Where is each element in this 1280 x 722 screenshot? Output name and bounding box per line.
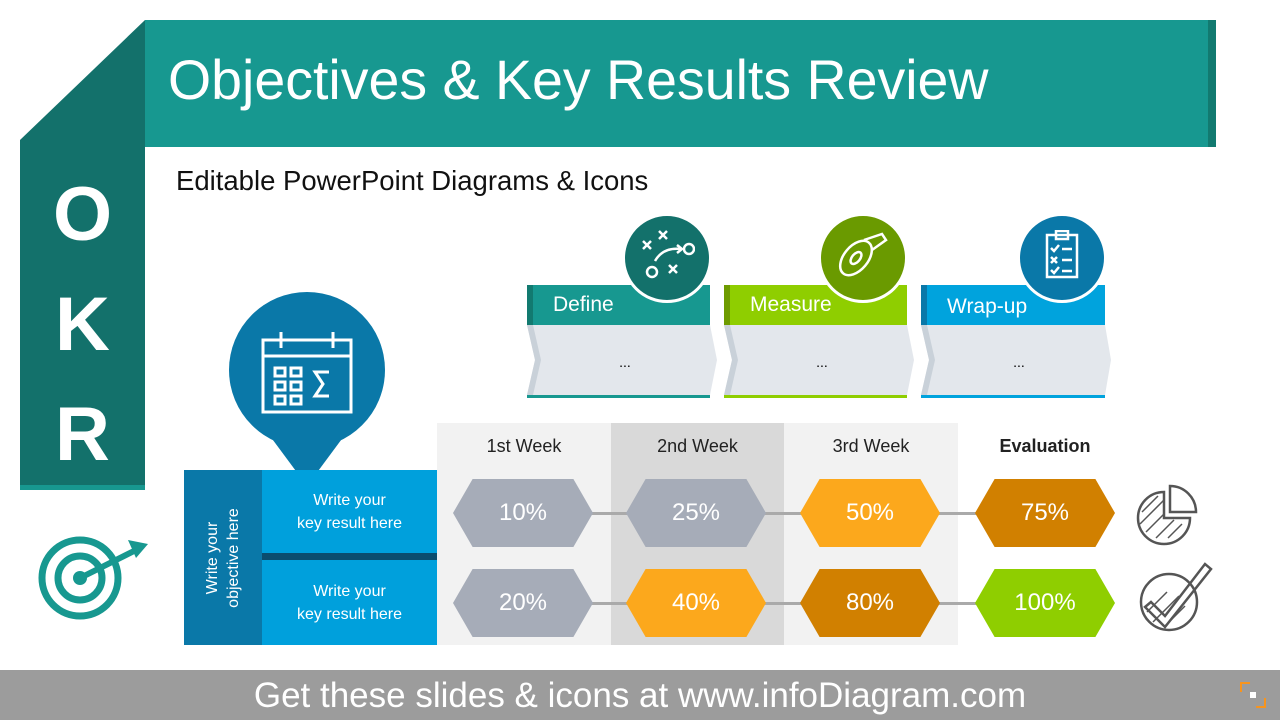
footer: Get these slides & icons at www.infoDiagram.com [254, 676, 1026, 715]
key result 1: Write your [313, 492, 386, 508]
hexagons row 1: 10% [499, 499, 547, 526]
text: 2nd Week [657, 436, 738, 456]
stage: Wrap-up [921, 216, 1111, 398]
hexagons row 2: 20% [499, 589, 547, 616]
stage: Measure [724, 216, 914, 398]
stage: Measure: Measure [750, 293, 832, 316]
stage: Wrap-up: Wrap-up [947, 295, 1027, 318]
objective cell: Write your [204, 522, 221, 594]
OKR side column: K [55, 282, 110, 367]
text: 40% [672, 589, 720, 616]
connectors [520, 512, 1060, 515]
key result 1 [262, 470, 437, 553]
logo [1240, 682, 1266, 708]
title: Objectives & Key Results Review [168, 49, 988, 111]
footer [0, 670, 1280, 720]
stage: Define [527, 216, 717, 398]
objective cell [184, 470, 262, 645]
key result 2 [262, 560, 437, 645]
text: 50% [846, 499, 894, 526]
OKR side column: O [53, 172, 112, 257]
OKR side column: R [55, 392, 110, 477]
table columns: 1st Week [487, 436, 561, 456]
icon: target [38, 536, 148, 620]
stage: Define: Define [553, 293, 614, 316]
header band [145, 20, 1216, 147]
key result 2: Write your [313, 582, 386, 600]
icon: checklist [1046, 230, 1078, 278]
text: 3rd Week [833, 436, 909, 456]
stage: Measure: ... [816, 354, 828, 370]
text: 100% [1014, 589, 1076, 616]
text: Evaluation [999, 436, 1091, 456]
stage: Define: ... [619, 354, 631, 370]
text: 25% [672, 499, 720, 526]
text: 75% [1021, 499, 1069, 526]
key result 1: key result here [297, 514, 402, 532]
calendar pin [229, 292, 385, 470]
subtitle: Editable PowerPoint Diagrams & Icons [176, 165, 648, 196]
text: 80% [846, 589, 894, 616]
table columns [437, 423, 611, 645]
icon: strategy [642, 230, 695, 278]
hexagons row 2 [453, 569, 593, 637]
objective cell: objective here [225, 508, 242, 608]
icon: pie chart [1136, 484, 1198, 546]
stage: Wrap-up: ... [1013, 354, 1025, 370]
OKR side column [20, 20, 145, 490]
icon: measuring tape [838, 232, 888, 276]
hexagons row 1 [453, 479, 593, 547]
icon: check [1140, 562, 1213, 632]
key result 2: key result here [297, 606, 402, 622]
